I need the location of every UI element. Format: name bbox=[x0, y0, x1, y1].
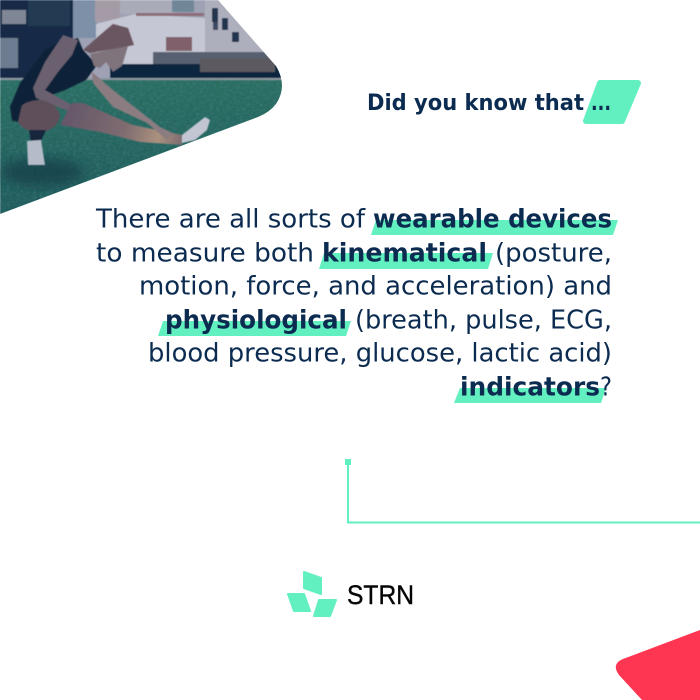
main paragraph: (posture, bbox=[495, 238, 612, 268]
highlight: physiological bbox=[158, 321, 351, 336]
main paragraph: blood pressure, glucose, lactic acid) bbox=[148, 338, 612, 368]
connector line bbox=[345, 459, 700, 522]
heading: Did you know that: ... bbox=[591, 91, 611, 116]
shorts bbox=[10, 104, 22, 122]
face and neck bbox=[90, 46, 128, 72]
heading: Did you know that: Did you know that bbox=[367, 91, 584, 116]
main paragraph: physiological bbox=[165, 306, 347, 336]
logo: STRN: STRN bbox=[347, 580, 414, 610]
main paragraph: ? bbox=[600, 372, 612, 402]
highlight: wearable devices bbox=[371, 220, 618, 235]
main paragraph: (breath, pulse, ECG, bbox=[355, 306, 612, 336]
photo: woman stretching on grass bbox=[0, 0, 290, 215]
extended leg bbox=[60, 103, 182, 145]
shoes bbox=[27, 140, 45, 165]
main paragraph bbox=[95, 204, 612, 402]
main paragraph: motion, force, and acceleration) and bbox=[139, 272, 612, 302]
logo: STRN bbox=[288, 572, 414, 616]
main paragraph: wearable devices bbox=[373, 204, 612, 234]
torso tank top bbox=[10, 38, 97, 122]
main paragraph: kinematical bbox=[322, 238, 487, 268]
front arm bbox=[92, 72, 173, 140]
main paragraph: to measure both bbox=[96, 238, 314, 268]
bent leg bbox=[17, 100, 60, 132]
main paragraph: There are all sorts of bbox=[95, 204, 366, 234]
main paragraph: indicators bbox=[460, 372, 600, 402]
highlight: indicators bbox=[454, 388, 606, 403]
heading badge bbox=[586, 83, 638, 121]
calf bbox=[29, 130, 46, 143]
highlight: kinematical bbox=[319, 253, 493, 269]
hair bbox=[83, 24, 134, 53]
red corner shape bbox=[616, 630, 700, 700]
near arm bbox=[33, 35, 78, 112]
